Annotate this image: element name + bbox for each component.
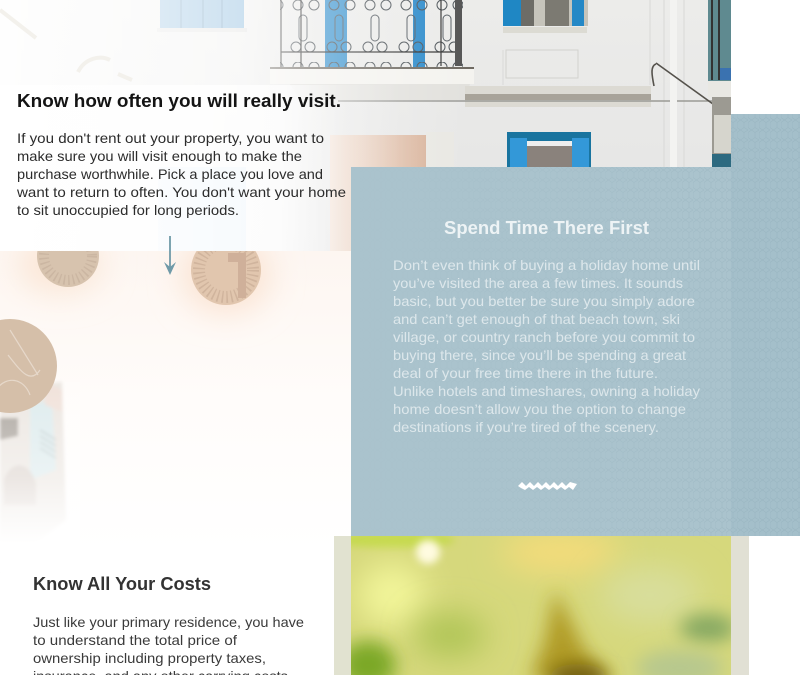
- door: [330, 135, 426, 251]
- text block: spend time: deal of your free time there in the future.: [393, 365, 658, 381]
- lamp arm: [651, 62, 712, 104]
- coin left: [37, 251, 99, 287]
- text block: spend time: Unlike hotels and timeshares, owning a holiday: [393, 383, 700, 399]
- text block: spend time: and can’t get enough of that beach town, ski: [393, 311, 680, 327]
- arrow: [164, 236, 176, 275]
- text block: spend time: destinations if you’re tired of the scenery.: [393, 419, 659, 435]
- text block: visit: make sure you will visit enough to make the: [17, 148, 302, 164]
- heading: spend time: Spend Time There First: [444, 218, 649, 238]
- banknotes: [0, 382, 64, 508]
- coins: [0, 225, 270, 572]
- texture: teal pattern: [623, 118, 800, 532]
- far right balcony: [708, 0, 731, 167]
- coin centre-left: [0, 319, 57, 413]
- text block: costs: Just like your primary residence, you have: [33, 614, 304, 630]
- text block: costs: [33, 614, 304, 675]
- text block: spend time: buying there, since you’ll be spending a great: [393, 347, 686, 363]
- upper right window: [503, 0, 588, 78]
- text block: costs: to understand the total price of: [33, 632, 237, 648]
- lower left window: [158, 167, 246, 251]
- text block: visit: want to return to often. You don't want your home: [16, 184, 346, 200]
- panel: lower-left background: [0, 251, 351, 551]
- text block: spend time: Don’t even think of buying a holiday home until: [393, 257, 700, 273]
- text block: spend time: you’ve visited the area a few times. It sounds: [393, 275, 683, 291]
- heading: know how often: Know how often you will really visit.: [17, 91, 341, 111]
- panel: teal right strip: [731, 114, 800, 536]
- text block: spend time: home doesn’t allow you the option to change: [393, 401, 686, 417]
- white fade overlay: [0, 0, 448, 251]
- text block: spend time: basic, but you better be sure you simply adore: [393, 293, 695, 309]
- heading: know all your costs: Know All Your Costs: [33, 574, 211, 594]
- coin right: [191, 251, 261, 305]
- text block: costs: ownership including property taxes,: [33, 650, 266, 666]
- zigzag divider: [518, 482, 577, 490]
- panel: teal main: [351, 167, 731, 536]
- text block: visit: purchase worthwhile. Pick a place you love and: [17, 166, 323, 182]
- text block: visit: to sit unoccupied for long periods.: [17, 202, 239, 218]
- lower right window: [507, 132, 591, 168]
- text block: spend time: village, or country ranch before you commit to: [393, 329, 695, 345]
- text block: visit: If you don't rent out your property, you want to: [17, 130, 324, 146]
- cornice: [338, 86, 731, 107]
- drain pipe: [670, 32, 677, 167]
- upper left window: [160, 0, 244, 28]
- text block: visit: [16, 130, 346, 218]
- photo: white building with blue shutters: [0, 0, 731, 251]
- balcony with railing: [270, 0, 474, 100]
- photo: blurred green foliage: [334, 532, 749, 675]
- text block: spend time: [393, 257, 700, 435]
